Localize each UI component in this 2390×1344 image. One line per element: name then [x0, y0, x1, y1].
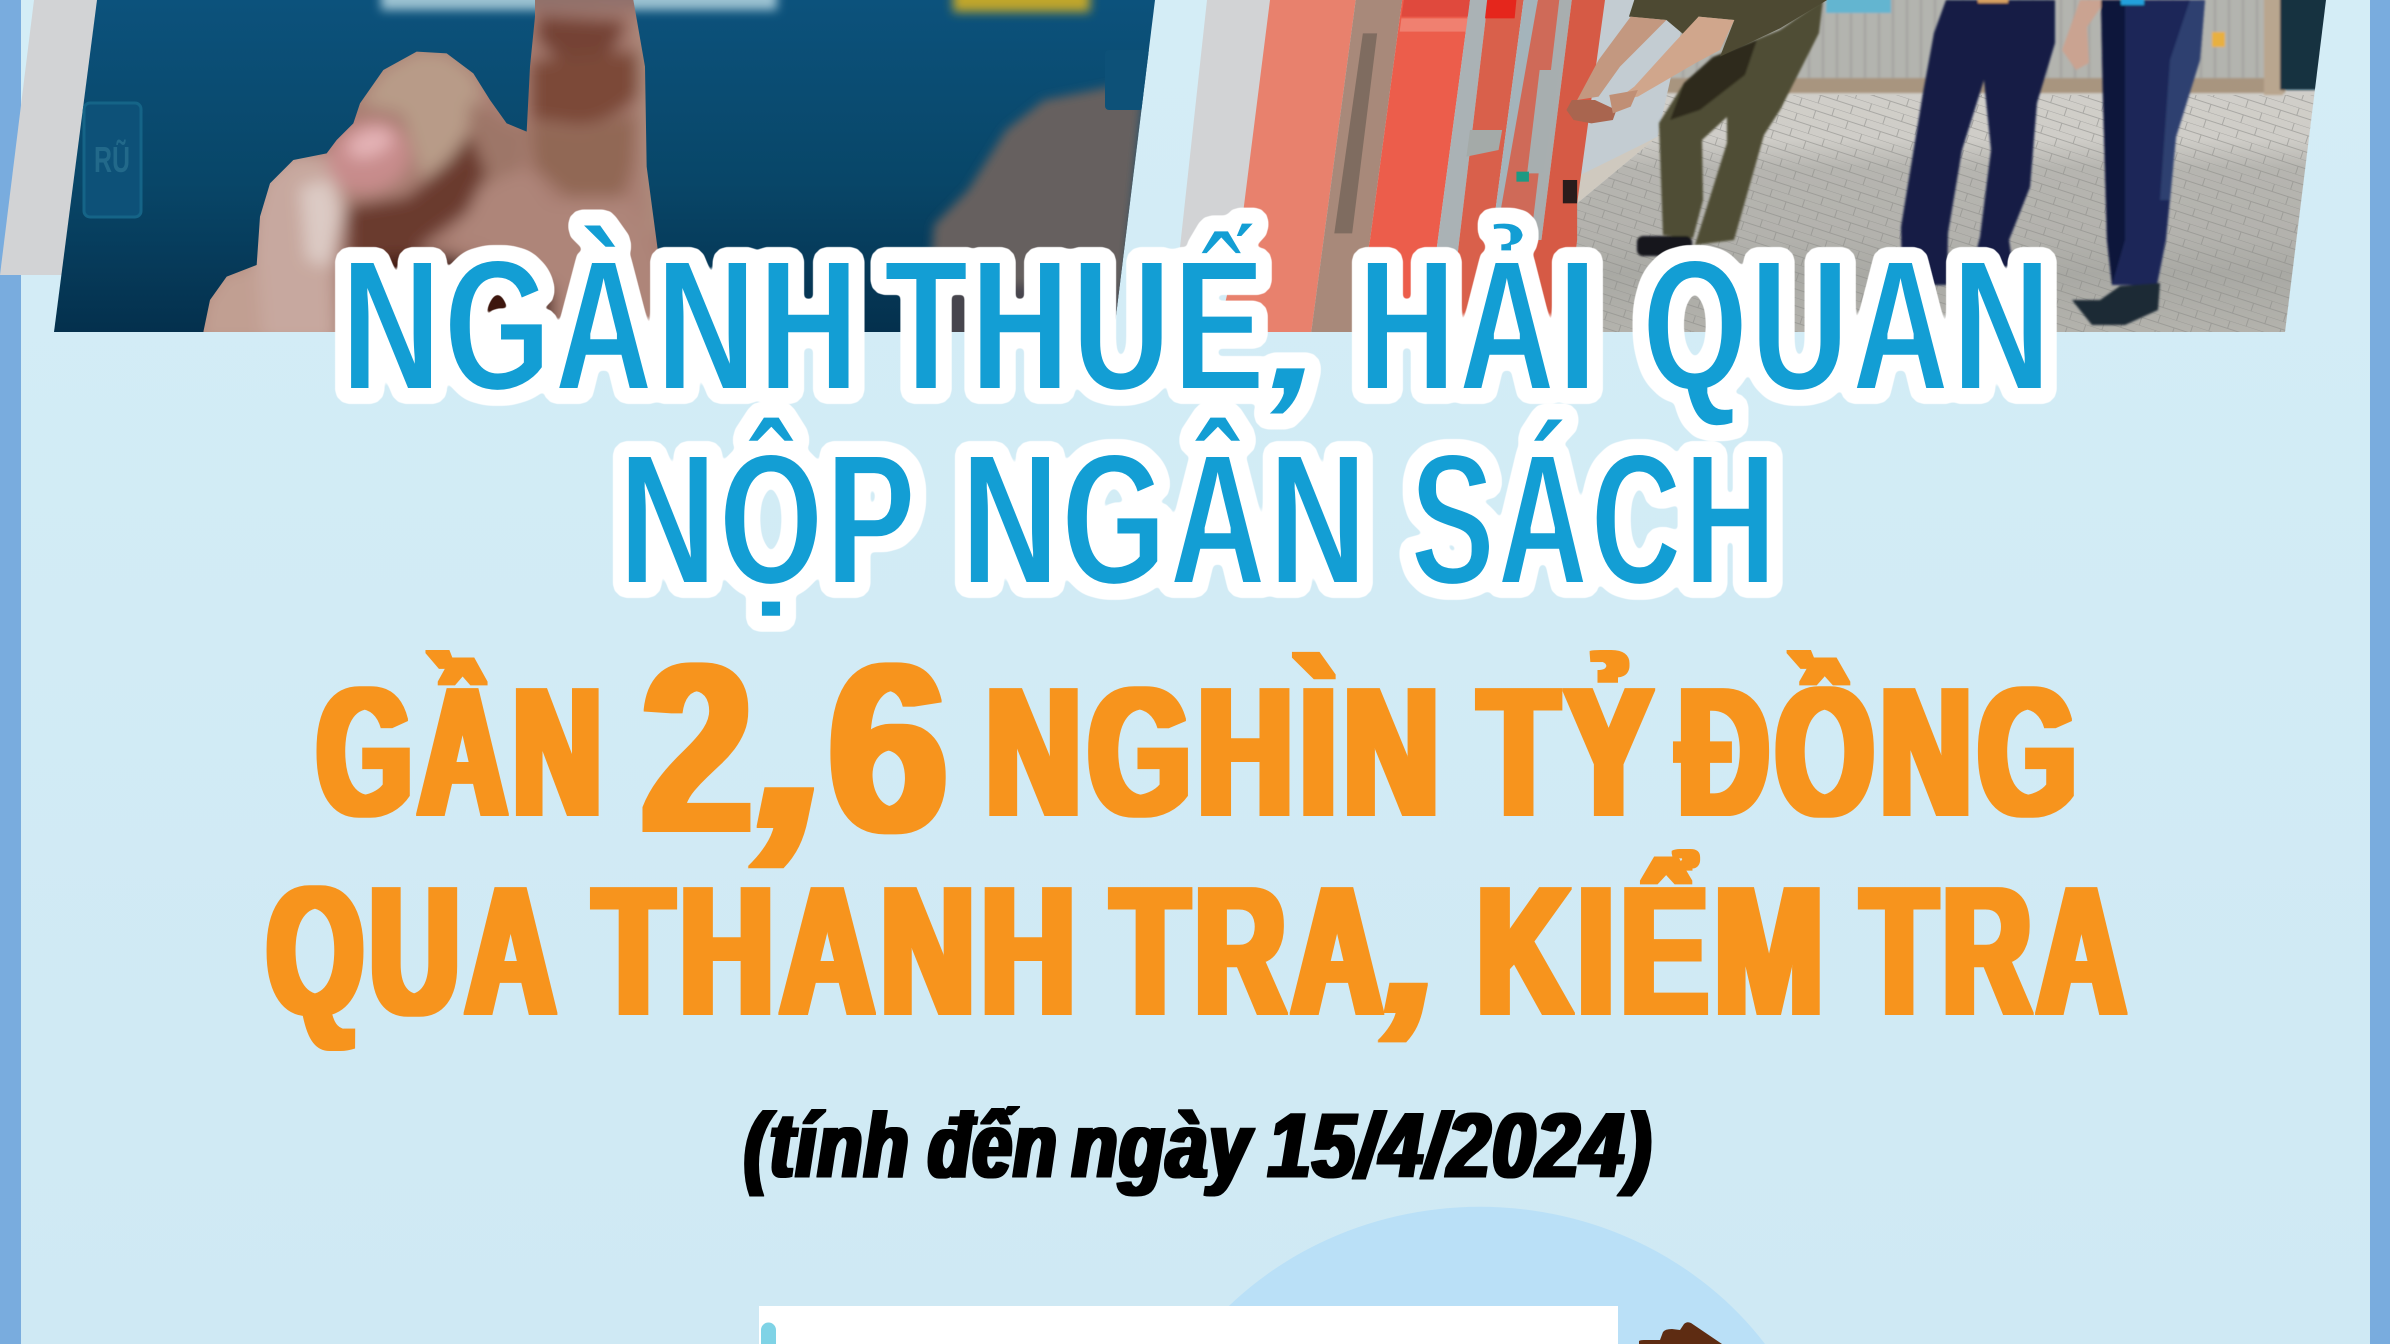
photo background screen — [50, 0, 1160, 332]
officer in blue trousers and heels — [2062, 0, 2205, 325]
hand pointing — [203, 0, 658, 332]
dark shadow between fingers — [347, 133, 553, 343]
heading: orange line 2: TRA — [1112, 848, 1389, 1053]
heading: blue line 1: , — [1263, 242, 1324, 426]
card accent marker — [761, 1323, 776, 1344]
heading: blue line 1: HẢI — [1359, 220, 1600, 432]
back container wall — [1660, 0, 2330, 95]
heading: blue line 2 — [620, 414, 1779, 626]
screen label: RŨ — [94, 138, 130, 180]
little finger — [197, 265, 263, 343]
heading: orange line 1: ĐỒNG — [1678, 649, 2083, 854]
heading: orange line 2: , — [1383, 841, 1439, 1053]
heading: blue line 2: NỘP — [620, 414, 919, 626]
left finger — [250, 153, 347, 343]
icon: brown hand top — [1639, 1322, 1722, 1344]
heading: orange line 1: TỶ — [1479, 649, 1659, 854]
date note: ngày — [1072, 1095, 1253, 1197]
panel: photo of hand touching a digital screen — [50, 0, 1165, 353]
decorative bubble behind card — [1195, 1207, 1765, 1344]
white content card — [759, 1306, 1618, 1344]
heading: orange line 2: KIỂM — [1477, 848, 1830, 1053]
panel: photo of customs officers inspecting a container — [1218, 0, 2330, 335]
highlighted figure 2,6 — [641, 593, 948, 883]
heading: orange line 2: QUA — [267, 848, 562, 1053]
palm tone — [450, 173, 670, 333]
heading: blue line 2: NGÂN — [962, 414, 1370, 626]
officer in olive uniform — [1566, 0, 1827, 256]
red shipping container — [1218, 0, 1681, 333]
top of middle finger — [360, 52, 483, 180]
heading: blue line 2: SÁCH — [1411, 414, 1779, 626]
heading: blue line 1: QUAN — [1643, 220, 2054, 432]
officer in navy trousers — [1901, 0, 2055, 285]
left edge bar — [0, 0, 21, 1344]
heading: orange line 1: NGHÌN — [986, 649, 1446, 854]
pink fingertip — [318, 111, 419, 203]
heading: blue line 1: THUẾ — [885, 220, 1268, 432]
heading: orange line 1: GẦN — [317, 649, 608, 854]
date note: (tính — [744, 1095, 910, 1197]
grey backing panel right — [1177, 0, 1280, 275]
highlighted figure 2,6: , — [752, 593, 832, 883]
date note: đến — [928, 1095, 1058, 1197]
right edge bar — [2370, 0, 2390, 1344]
grey backing panel left — [0, 0, 110, 275]
hand base tone — [170, 0, 703, 353]
paved ground — [1560, 90, 2330, 335]
heading: orange line 1 — [317, 649, 2083, 854]
index finger shading — [523, 0, 657, 10]
heading: orange line 2: TRA — [1862, 848, 2132, 1053]
heading: blue line 1 — [342, 220, 2054, 432]
blurred screen details — [84, 0, 1165, 345]
date note: 15/4/2024) — [1268, 1095, 1653, 1197]
highlighted figure 2,6: 6 — [828, 614, 948, 882]
date note — [744, 1095, 1653, 1197]
highlighted figure 2,6: 2 — [641, 614, 753, 882]
heading: orange line 2 — [267, 841, 2132, 1053]
heading: blue line 1: NGÀNH — [342, 220, 862, 432]
heading: orange line 2: THANH — [594, 848, 1082, 1053]
brick pattern — [1560, 95, 2330, 335]
